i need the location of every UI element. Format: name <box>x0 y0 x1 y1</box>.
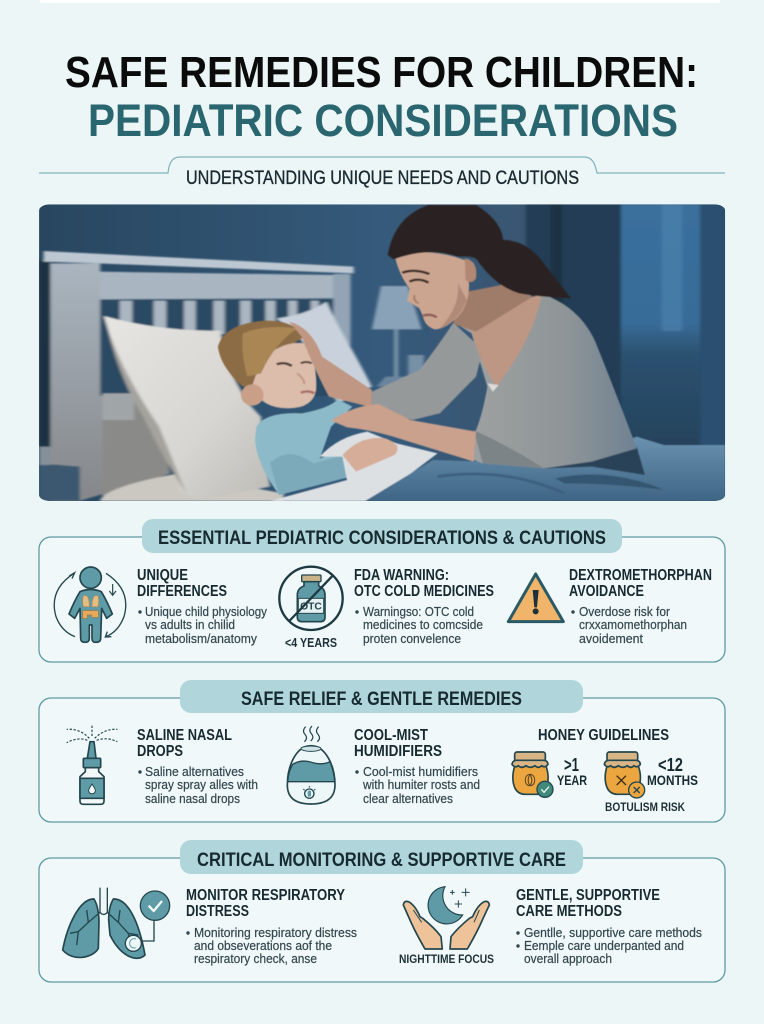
text: cool-mist humidifiers: HUMIDIFIERS <box>354 743 442 760</box>
mother lower clothing <box>546 447 645 475</box>
section heading pill <box>142 519 622 553</box>
text: dextromethorphan avoidance: Overdose risk for <box>579 604 671 619</box>
text: unique differences: UNIQUE <box>137 567 188 584</box>
face <box>395 252 469 329</box>
white blanket fold <box>270 432 438 501</box>
text: cool-mist humidifiers: clear alternatives <box>363 791 453 806</box>
label: under 12 months: MONTHS <box>647 772 698 788</box>
text: unique differences: metabolism/anatomy <box>145 631 257 646</box>
text: saline nasal drops: Saline alternatives <box>145 764 244 779</box>
text: monitor respiratory distress: MONITOR RESPIRATORY <box>186 887 346 904</box>
text: FDA warning: OTC COLD MEDICINES <box>354 583 494 600</box>
section heading pill: CRITICAL MONITORING & SUPPORTIVE CARE <box>197 850 566 871</box>
top white strip <box>40 0 720 3</box>
text: monitor respiratory distress: DISTRESS <box>186 903 249 920</box>
headboard <box>50 263 105 502</box>
section heading pill <box>180 680 583 713</box>
title: SAFE REMEDIES FOR CHILDREN: <box>65 48 698 97</box>
label: under 12 months: <12 <box>658 755 683 775</box>
icon: honey jar unsafe under 12 months <box>604 752 645 798</box>
front pillow <box>104 316 270 500</box>
text: cool-mist humidifiers: with humiter rosts and <box>362 777 480 792</box>
icon: lungs with check monitor <box>63 888 170 958</box>
photo: mother caring for sick child in bed <box>39 204 725 502</box>
icon: honey jar safe over 1 year <box>512 752 553 797</box>
text: FDA warning: Warningso: OTC cold <box>363 604 474 619</box>
label: over 1 year: >1 <box>564 755 579 775</box>
section heading pill: SAFE RELIEF & GENTLE REMEDIES <box>241 689 522 710</box>
text: cool-mist humidifiers: Cool-mist humidifiers <box>363 764 478 779</box>
text: gentle supportive care: Eemple care underpanted and <box>524 938 684 953</box>
text: FDA warning <box>354 567 494 646</box>
text: dextromethorphan avoidance: AVOIDANCE <box>569 583 644 600</box>
text: unique differences <box>137 567 267 646</box>
icon: child body with metabolism arrows <box>54 567 126 642</box>
mother forearm and hand <box>331 404 476 462</box>
text: FDA warning: FDA WARNING: <box>354 567 449 584</box>
section heading pill: ESSENTIAL PEDIATRIC CONSIDERATIONS & CAUTIONS <box>158 528 606 549</box>
text: monitor respiratory distress: and obseverations aof the <box>194 938 332 953</box>
curtains <box>525 204 622 405</box>
mother chest skin <box>471 295 542 387</box>
text: saline nasal drops: DROPS <box>137 743 183 760</box>
text: cool-mist humidifiers: COOL-MIST <box>354 727 428 744</box>
honey guidelines: HONEY GUIDELINES <box>538 727 669 744</box>
icon: warning triangle <box>508 574 563 622</box>
text: gentle supportive care <box>516 887 702 966</box>
neck <box>453 283 533 332</box>
icon: hands holding moon, nighttime focus: NIGHTTIME FOCUS <box>399 952 494 966</box>
text: dextromethorphan avoidance: DEXTROMETHORPHAN <box>569 567 712 584</box>
section heading pill <box>180 840 583 874</box>
text: cool-mist humidifiers <box>354 727 480 806</box>
text: unique differences: vs adults in chilid <box>145 617 235 632</box>
text: saline nasal drops: saline nasal drops <box>145 791 240 806</box>
text: FDA warning: proten convelence <box>363 631 461 646</box>
child body <box>255 399 352 495</box>
mother arm and hand on head <box>289 322 372 407</box>
label: over 1 year <box>557 755 587 788</box>
text: gentle supportive care: overall approach <box>524 951 612 966</box>
text: saline nasal drops <box>137 727 258 806</box>
icon: cool-mist humidifier <box>287 726 335 804</box>
icon: no OTC medicine under 4 years: <4 YEARS <box>285 635 337 650</box>
text: saline nasal drops: SALINE NASAL <box>137 727 232 744</box>
text: dextromethorphan avoidance <box>569 567 712 646</box>
child hair <box>218 321 304 387</box>
icon: hands holding moon, nighttime focus <box>399 887 494 966</box>
text: dextromethorphan avoidance: crxxamomethorphan <box>579 617 687 632</box>
lamp <box>372 286 422 329</box>
text: monitor respiratory distress: Monitoring respiratory distress <box>194 925 357 940</box>
face features <box>402 271 429 274</box>
duvet <box>365 437 725 501</box>
child <box>218 205 725 501</box>
text: monitor respiratory distress: respiratory check, anse <box>194 951 317 966</box>
panel: essential considerations <box>39 519 725 662</box>
label: under 12 months <box>647 755 698 788</box>
icon: no OTC medicine under 4 years <box>279 567 343 650</box>
text: unique differences: DIFFERENCES <box>137 583 227 600</box>
mother sweater <box>456 294 637 468</box>
title: PEDIATRIC CONSIDERATIONS <box>88 95 678 146</box>
sheet <box>100 474 284 501</box>
child face <box>252 343 316 408</box>
icon: no OTC medicine under 4 years: OTC <box>300 602 322 613</box>
icon: saline spray bottle <box>67 726 117 804</box>
text: gentle supportive care: GENTLE, SUPPORTIVE <box>516 887 660 904</box>
child hand <box>342 438 398 472</box>
honey guidelines <box>512 727 698 814</box>
panel: critical monitoring <box>39 840 725 982</box>
label: over 1 year: YEAR <box>557 772 587 788</box>
text: gentle supportive care: CARE METHODS <box>516 903 622 920</box>
subtitle with bracket line: UNDERSTANDING UNIQUE NEEDS AND CAUTIONS <box>186 168 579 189</box>
text: monitor respiratory distress <box>186 887 357 966</box>
text: gentle supportive care: Gentlle, supportive care methods <box>524 925 702 940</box>
subtitle with bracket line <box>39 157 725 189</box>
label: botulism risk: BOTULISM RISK <box>605 800 685 814</box>
text: FDA warning: medicines to comcside <box>363 617 483 632</box>
text: unique differences: Unique child physiology <box>145 604 267 619</box>
text: dextromethorphan avoidance: avoidement <box>579 631 643 646</box>
panel: safe relief <box>39 680 725 822</box>
side table <box>39 463 80 501</box>
title <box>65 48 698 146</box>
back pillow <box>277 302 372 403</box>
mother hair <box>388 205 571 298</box>
text: saline nasal drops: spray spray alles with <box>145 777 258 792</box>
